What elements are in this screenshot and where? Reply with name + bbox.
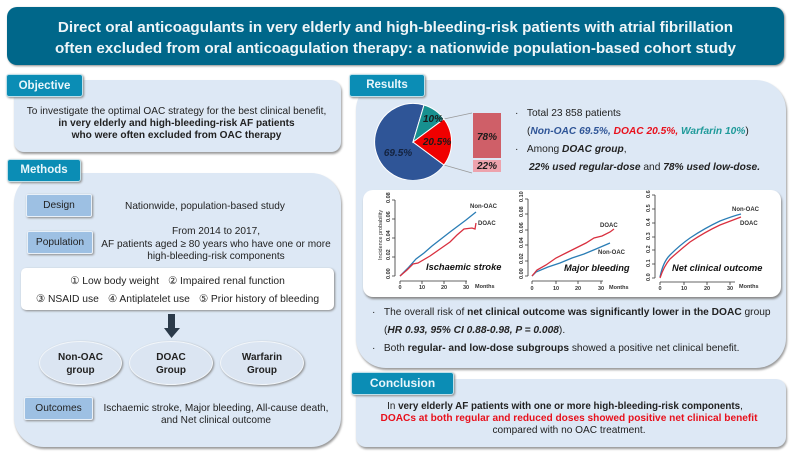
chart: ischaemic stroke: 30 <box>463 285 469 291</box>
group: warfarin: Group <box>247 364 277 376</box>
chart: net clinical outcome: 0.0 <box>646 273 652 281</box>
chart: net clinical outcome: Non-OAC <box>732 207 760 213</box>
design label: Design <box>43 200 75 211</box>
chart: major bleeding: 0 <box>530 286 534 292</box>
chart: major bleeding: Major bleeding <box>564 263 630 273</box>
chart: major bleeding: 0.10 <box>519 191 525 202</box>
conclusion text: compared with no OAC treatment. <box>492 425 646 436</box>
chart: ischaemic stroke: Incidence probability <box>378 210 384 260</box>
population text: high-bleeding-risk components <box>147 251 285 262</box>
bullet: overall risk: · The overall risk of net clinical outcome was significantly lower in the DOAC group <box>372 307 771 318</box>
chart: net clinical outcome: 20 <box>704 286 710 292</box>
title banner: often excluded from oral anticoagulation therapy: a nationwide population-based cohort study <box>55 40 736 57</box>
group: warfarin <box>220 341 304 385</box>
panel: methods <box>14 173 341 447</box>
chart: net clinical outcome: 0.5 <box>646 204 652 212</box>
group: DOAC: Group <box>156 364 186 376</box>
chart: major bleeding: 0.02 <box>519 253 525 264</box>
group: non-OAC <box>39 341 122 385</box>
group: non-OAC: Non-OAC <box>58 352 103 363</box>
outcomes text <box>104 403 328 426</box>
group: non-OAC: group <box>66 364 95 376</box>
chart: ischaemic stroke: 20 <box>441 285 447 291</box>
chart: net clinical outcome: 30 <box>727 286 733 292</box>
chart: net clinical outcome: Net clinical outcome <box>672 263 762 273</box>
results summary bullets <box>515 108 760 173</box>
bullet: dose split: 22% used regular-dose and 78% used low-dose. <box>529 162 760 173</box>
chart: net clinical outcome <box>646 190 762 292</box>
heading: results: Results <box>366 79 408 91</box>
bullet: total: · Total 23 858 patients <box>515 108 621 119</box>
objective text: who were often excluded from OAC therapy <box>72 130 281 141</box>
chart: net clinical outcome: 0.1 <box>646 259 652 267</box>
panel: results <box>356 80 786 368</box>
outcomes text: and Net clinical outcome <box>161 415 271 426</box>
chart: major bleeding: Non-OAC <box>598 250 626 256</box>
pie labels: 20.5% <box>422 137 451 148</box>
panel: objective <box>14 80 341 152</box>
conclusion text <box>381 401 758 436</box>
population label: Population <box>36 237 84 248</box>
chart: net clinical outcome: 0.3 <box>646 232 652 240</box>
outcomes label <box>24 397 93 420</box>
stacked bar: regular dose <box>473 160 501 172</box>
bullet: subgroups: · Both regular- and low-dose subgroups showed a positive net clinical benefit. <box>372 343 739 354</box>
heading: results <box>349 74 425 97</box>
chart: net clinical outcome: 0 <box>658 286 662 292</box>
chart: major bleeding: 10 <box>553 286 559 292</box>
stacked bar: low dose <box>473 113 501 158</box>
arrow: down <box>164 314 180 338</box>
population label <box>27 231 93 254</box>
chart: net clinical outcome: 0.2 <box>646 245 652 253</box>
conclusion text: DOACs at both regular and reduced doses showed positive net clinical benefit <box>381 413 757 424</box>
outcomes label: Outcomes <box>35 403 82 414</box>
chart: major bleeding: 0.08 <box>519 206 525 217</box>
pie labels: 78% <box>477 132 497 143</box>
chart: net clinical outcome: Months <box>739 284 759 290</box>
chart: net clinical outcome: 0.6 <box>646 190 652 198</box>
pie: non-OAC slice <box>375 103 444 180</box>
results findings bullets <box>372 307 771 354</box>
heading: objective <box>6 74 83 97</box>
pie: DOAC slice <box>413 119 452 165</box>
pie labels: 69.5% <box>384 148 412 159</box>
chart: major bleeding: 20 <box>575 286 581 292</box>
bullet: group shares: (Non-OAC 69.5%, DOAC 20.5%, Warfarin 10%) <box>527 126 749 137</box>
pie labels: 10% <box>423 114 443 125</box>
group: warfarin: Warfarin <box>242 352 282 363</box>
pie labels: 22% <box>476 161 497 172</box>
objective text: in very elderly and high-bleeding-risk AF patients <box>58 118 295 129</box>
population text: From 2014 to 2017, <box>172 226 260 237</box>
chart: ischaemic stroke: 0.00 <box>386 268 392 279</box>
chart: major bleeding: 0.06 <box>519 222 525 233</box>
chart: ischaemic stroke: 10 <box>419 285 425 291</box>
chart: net clinical outcome: 0.4 <box>646 217 652 226</box>
group: DOAC: DOAC <box>156 352 186 363</box>
pie labels <box>384 114 497 172</box>
title banner: Direct oral anticoagulants in very elderly and high-bleeding-risk patients with atrial fibrillation <box>58 19 733 36</box>
group: DOAC <box>129 341 213 385</box>
chart: major bleeding: DOAC <box>600 223 618 229</box>
chart: ischaemic stroke: 0.08 <box>386 192 392 203</box>
heading: conclusion <box>351 372 454 395</box>
components row 1: ① Low body weight ② Impaired renal function <box>70 276 285 287</box>
outcomes text: Ischaemic stroke, Major bleeding, All-cause death, <box>104 403 328 414</box>
heading: methods <box>7 159 81 182</box>
heading: conclusion: Conclusion <box>370 376 435 390</box>
connector lines <box>444 113 472 173</box>
chart: major bleeding: Months <box>609 285 629 291</box>
pie chart <box>374 103 501 180</box>
objective text: To investigate the optimal OAC strategy for the best clinical benefit, <box>27 106 326 117</box>
design text: Nationwide, population-based study <box>125 201 285 212</box>
chart: net clinical outcome: DOAC <box>740 221 758 227</box>
objective text <box>26 106 326 141</box>
panel: conclusion <box>356 379 786 447</box>
heading: methods: Methods <box>20 164 68 176</box>
pie: warfarin slice <box>413 105 444 142</box>
conclusion text: In very elderly AF patients with one or more high-bleeding-risk components, <box>387 401 743 412</box>
chart: ischaemic stroke: Ischaemic stroke <box>426 262 501 272</box>
title banner <box>7 7 784 65</box>
chart: ischaemic stroke <box>378 192 502 291</box>
chart: major bleeding: 30 <box>598 286 604 292</box>
bullet: hazard ratio: (HR 0.93, 95% CI 0.88-0.98, P = 0.008). <box>384 325 565 336</box>
panel: Kaplan-Meier charts <box>363 190 781 297</box>
population text <box>101 226 331 262</box>
chart: ischaemic stroke: 0 <box>398 285 402 291</box>
heading: objective: Objective <box>19 80 70 92</box>
chart: ischaemic stroke: Months <box>475 284 495 290</box>
chart: major bleeding: 0.04 <box>519 236 525 248</box>
design label <box>26 194 92 217</box>
components row 2: ③ NSAID use ④ Antiplatelet use ⑤ Prior history of bleeding <box>36 294 319 305</box>
chart: ischaemic stroke: Non-OAC <box>470 204 498 210</box>
chart: major bleeding <box>519 191 630 292</box>
population text: AF patients aged ≥ 80 years who have one or more <box>101 238 331 250</box>
chart: ischaemic stroke: 0.04 <box>386 229 392 241</box>
chart: ischaemic stroke: 0.02 <box>386 249 392 260</box>
chart: ischaemic stroke: 0.06 <box>386 211 392 222</box>
high-bleeding-risk components list <box>21 268 334 310</box>
bullet: DOAC group: · Among DOAC group, <box>515 144 627 155</box>
chart: major bleeding: 0.00 <box>519 268 525 279</box>
chart: net clinical outcome: 10 <box>681 286 687 292</box>
chart: ischaemic stroke: DOAC <box>478 221 496 227</box>
